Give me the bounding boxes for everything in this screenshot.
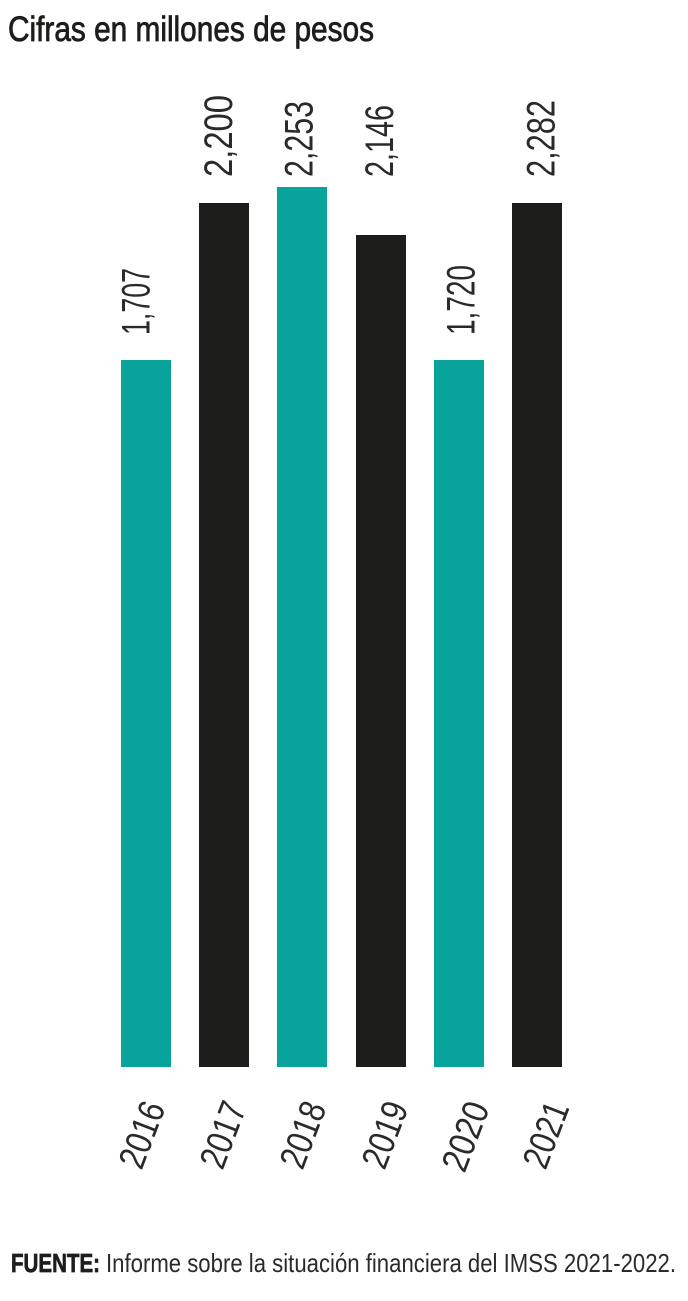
- year label 2020: 2020: [434, 1096, 497, 1177]
- year label 2021: 2021: [515, 1096, 577, 1174]
- year label 2019: 2019: [354, 1096, 416, 1174]
- bar 2021: [512, 203, 562, 1067]
- bar chart: [111, 95, 577, 1177]
- value label 2017: 2,200: [197, 95, 241, 177]
- bar 2020: [434, 360, 484, 1067]
- title: Cifras en millones de pesos: [8, 10, 374, 49]
- year label 2016: 2016: [111, 1096, 173, 1174]
- year label 2018: 2018: [272, 1096, 334, 1174]
- bar 2018: [277, 187, 327, 1067]
- bar 2019: [356, 235, 406, 1067]
- value label 2021: 2,282: [520, 100, 564, 177]
- value label 2016: 1,707: [114, 268, 158, 335]
- bar 2017: [199, 203, 249, 1067]
- value label 2020: 1,720: [440, 265, 484, 335]
- value label 2019: 2,146: [358, 105, 402, 177]
- year label 2017: 2017: [192, 1096, 254, 1174]
- bar 2016: [121, 360, 171, 1067]
- source note: FUENTE:: [11, 1248, 100, 1278]
- value label 2018: 2,253: [278, 101, 322, 177]
